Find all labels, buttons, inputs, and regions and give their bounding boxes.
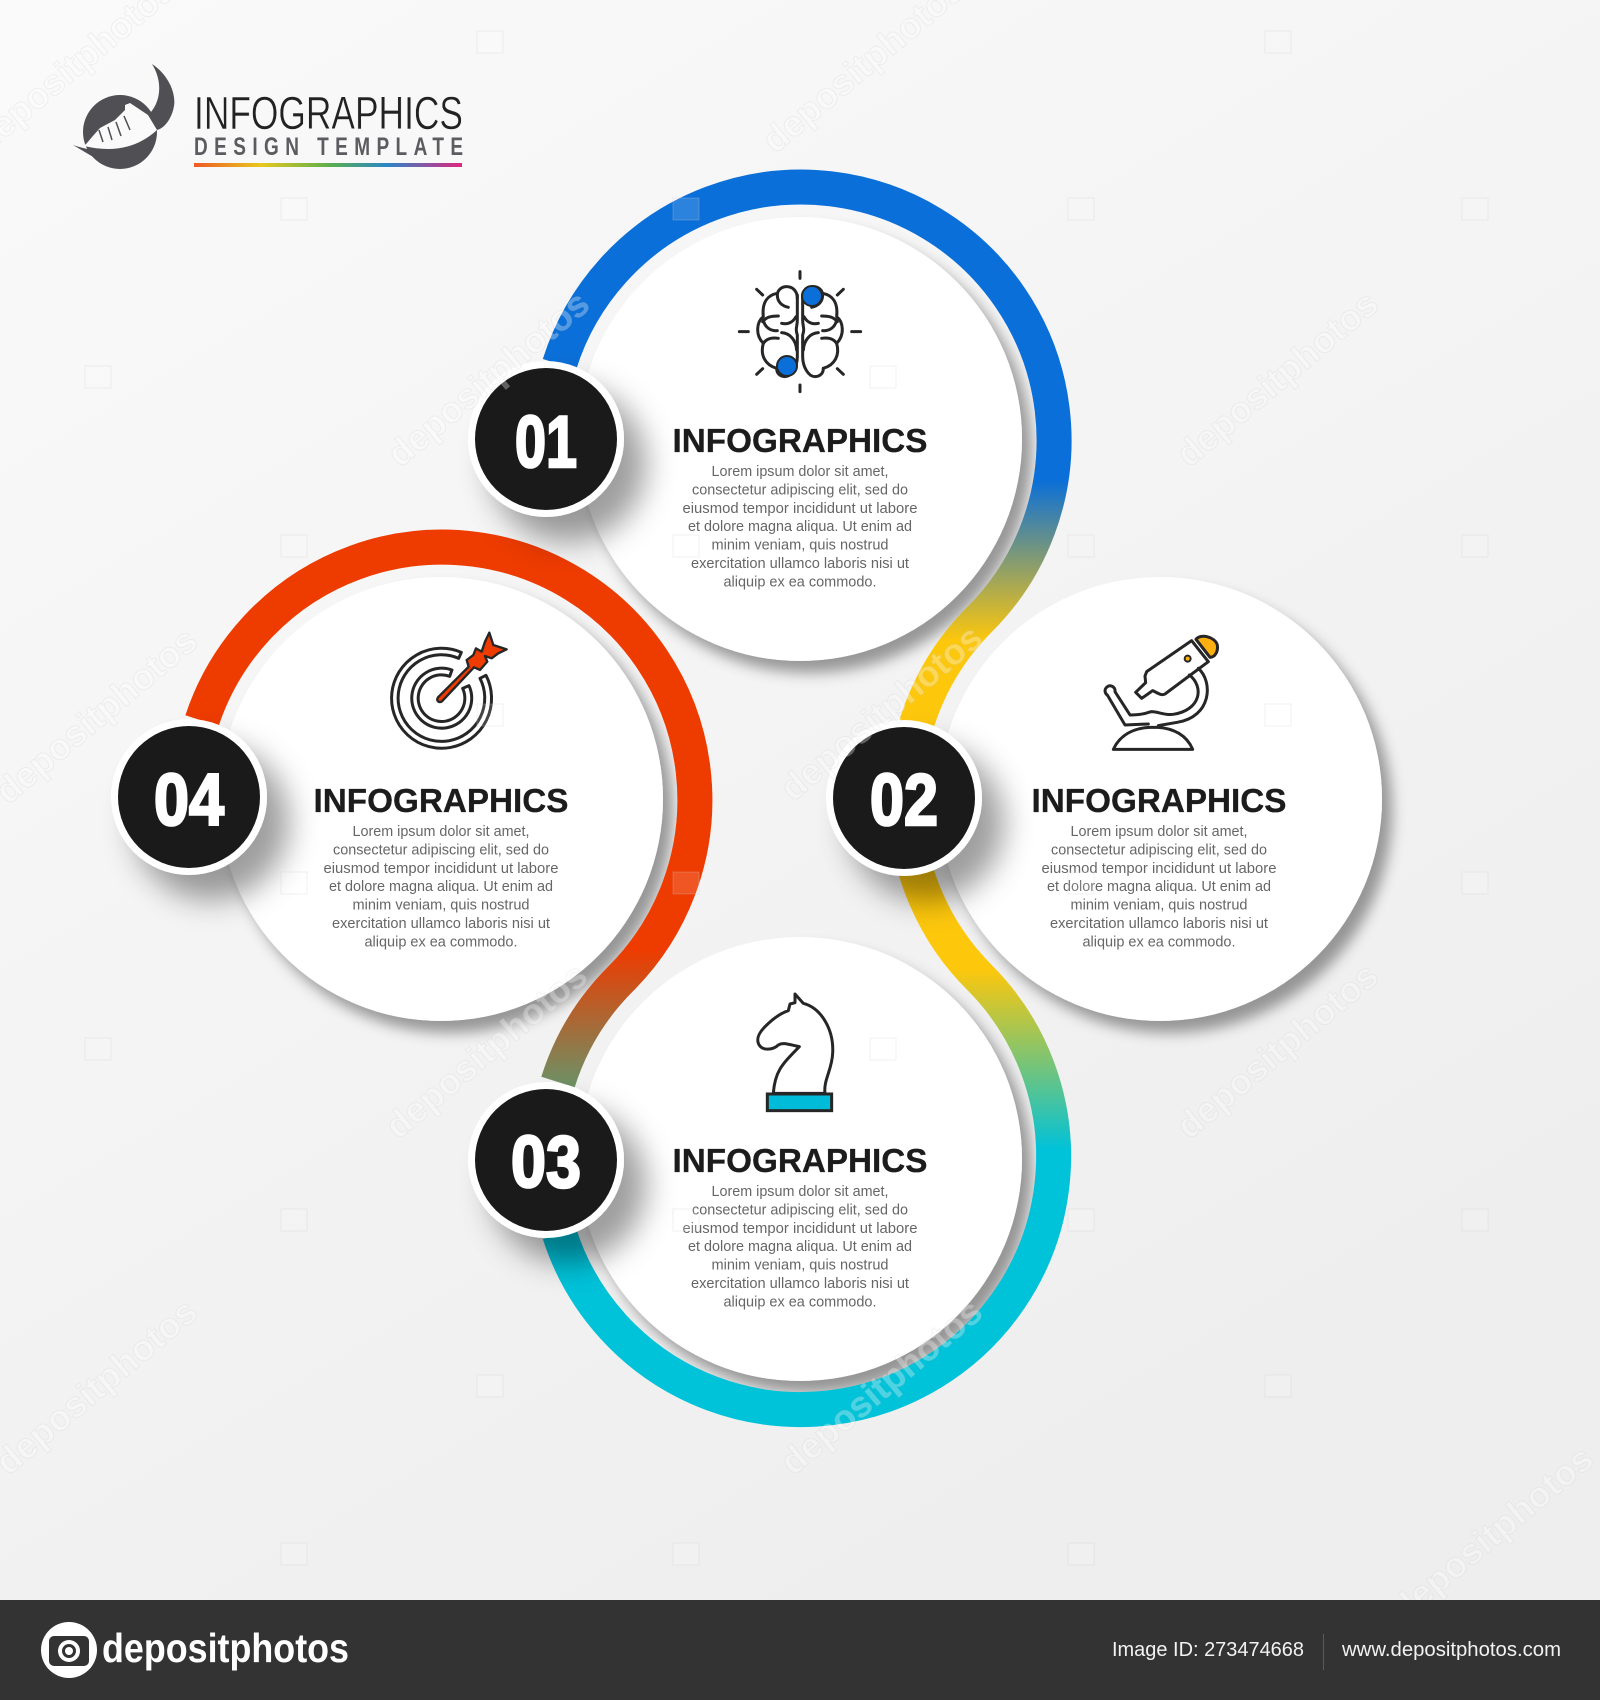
badge 03: 03 bbox=[511, 1122, 581, 1203]
text block: Lorem ipsum dolor sit amet, bbox=[712, 1183, 888, 1200]
text block: Lorem ipsum dolor sit amet, bbox=[712, 463, 888, 480]
text block: et dolore magna aliqua. Ut enim ad bbox=[688, 518, 912, 535]
icon: chess knight bbox=[758, 994, 833, 1111]
heading: INFOGRAPHICS bbox=[314, 782, 568, 819]
watermark: depositphotos bbox=[772, 616, 990, 808]
ribbon: red bbox=[202, 547, 695, 1082]
header title: INFOGRAPHICS bbox=[194, 87, 463, 139]
heading: INFOGRAPHICS bbox=[672, 422, 928, 459]
watermark: depositphotos bbox=[1383, 1437, 1600, 1629]
text block: aliquip ex ea commodo. bbox=[364, 934, 518, 950]
badge 02 bbox=[826, 720, 982, 876]
header title: DESIGN TEMPLATE bbox=[194, 132, 463, 161]
heading: INFOGRAPHICS bbox=[1032, 782, 1286, 819]
text block bbox=[682, 1183, 918, 1310]
text block: exercitation ullamco laboris nisi ut bbox=[332, 915, 551, 932]
text block: eiusmod tempor incididunt ut labore bbox=[1042, 860, 1276, 877]
text block: minim veniam, quis nostrud bbox=[712, 536, 888, 554]
text block: et dolore magna aliqua. Ut enim ad bbox=[688, 1238, 912, 1255]
text block bbox=[324, 823, 558, 950]
icon: camera logo bbox=[41, 1622, 97, 1678]
text block: Lorem ipsum dolor sit amet, bbox=[1070, 823, 1248, 840]
panel: step 02 bbox=[938, 577, 1382, 1021]
text block: minim veniam, quis nostrud bbox=[712, 1256, 888, 1274]
text block: eiusmod tempor incididunt ut labore bbox=[682, 500, 918, 517]
heading: INFOGRAPHICS bbox=[672, 1142, 928, 1179]
watermark: depositphotos bbox=[379, 282, 597, 474]
header title bbox=[194, 87, 463, 167]
text block: Lorem ipsum dolor sit amet, bbox=[352, 823, 530, 840]
badge 01 bbox=[468, 361, 624, 517]
text block: aliquip ex ea commodo. bbox=[1082, 934, 1236, 950]
text block: minim veniam, quis nostrud bbox=[352, 896, 530, 914]
watermark: depositphotos bbox=[377, 954, 595, 1146]
panel: step 01 bbox=[578, 217, 1022, 661]
footer bar bbox=[0, 1600, 1600, 1700]
badge 04: 04 bbox=[154, 760, 224, 841]
text block: eiusmod tempor incididunt ut labore bbox=[682, 1220, 918, 1237]
header logo bbox=[73, 64, 174, 169]
image id: Image ID: 273474668 bbox=[1112, 1638, 1304, 1661]
badge 02: 02 bbox=[870, 760, 938, 841]
icon: brain bbox=[739, 272, 861, 392]
icon: microscope bbox=[1105, 636, 1217, 749]
badge 03 bbox=[468, 1082, 624, 1238]
text block bbox=[1042, 823, 1276, 950]
text block: et dolore magna aliqua. Ut enim ad bbox=[329, 878, 553, 895]
panel: step 04 bbox=[219, 577, 663, 1021]
text block bbox=[682, 463, 918, 590]
text block: consectetur adipiscing elit, sed do bbox=[692, 482, 908, 498]
text block: aliquip ex ea commodo. bbox=[724, 574, 876, 590]
text block: minim veniam, quis nostrud bbox=[1070, 896, 1248, 914]
panel: step 03 bbox=[578, 937, 1022, 1381]
text block: consectetur adipiscing elit, sed do bbox=[333, 842, 549, 858]
text block: et dolore magna aliqua. Ut enim ad bbox=[1047, 878, 1271, 895]
icon: target with arrow bbox=[392, 633, 507, 748]
watermark: depositphotos bbox=[1168, 954, 1386, 1146]
text block: eiusmod tempor incididunt ut labore bbox=[324, 860, 558, 877]
website: www.depositphotos.com bbox=[1341, 1638, 1561, 1661]
text block: exercitation ullamco laboris nisi ut bbox=[691, 555, 910, 572]
text block: exercitation ullamco laboris nisi ut bbox=[691, 1275, 910, 1292]
watermark: depositphotos bbox=[772, 1290, 990, 1482]
badge 01: 01 bbox=[515, 402, 577, 483]
text block: exercitation ullamco laboris nisi ut bbox=[1050, 915, 1269, 932]
text block: consectetur adipiscing elit, sed do bbox=[1051, 842, 1267, 858]
text block: aliquip ex ea commodo. bbox=[724, 1294, 876, 1310]
watermark: depositphotos bbox=[1168, 282, 1386, 474]
footer brand name: depositphotos bbox=[102, 1625, 349, 1671]
ribbon: blue to yellow to cyan bbox=[560, 187, 1054, 1410]
badge 04 bbox=[111, 719, 267, 875]
text block: consectetur adipiscing elit, sed do bbox=[692, 1202, 908, 1218]
